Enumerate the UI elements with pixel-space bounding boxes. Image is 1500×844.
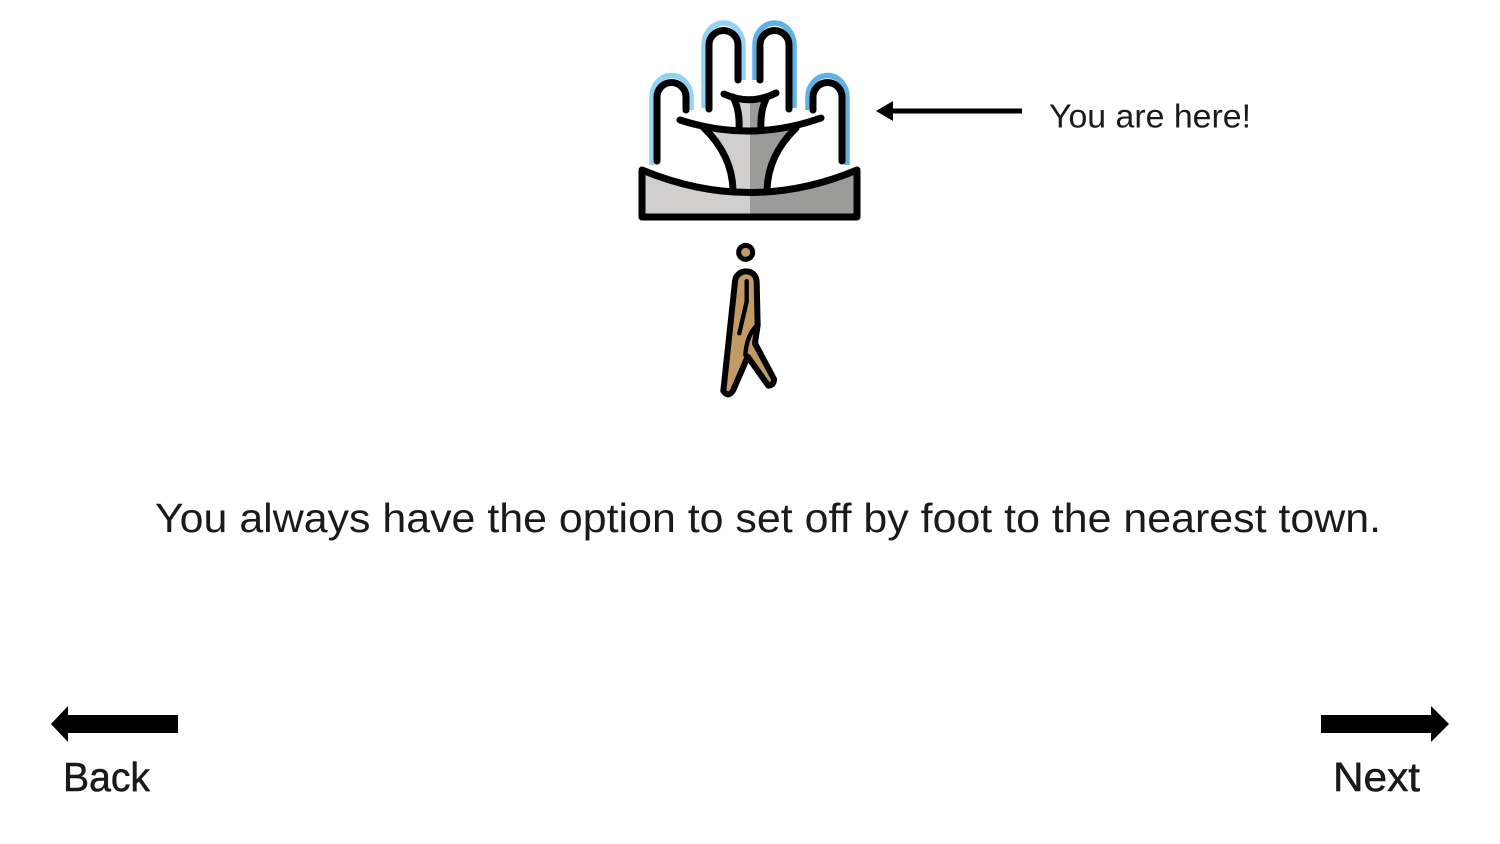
body text: You always have the option to set off by foot to the nearest town.: [155, 495, 1381, 541]
icon: fountain: [642, 23, 857, 217]
icon: person walking: [723, 245, 774, 394]
label: back: Back: [63, 754, 150, 800]
label: you are here: You are here!: [1049, 98, 1251, 134]
arrow: next: [1321, 706, 1449, 742]
arrow: pointing at fountain: [876, 101, 1022, 121]
label: next: Next: [1333, 754, 1421, 800]
back button: [51, 706, 178, 800]
arrow: back: [51, 706, 178, 742]
next button: [1321, 706, 1449, 800]
